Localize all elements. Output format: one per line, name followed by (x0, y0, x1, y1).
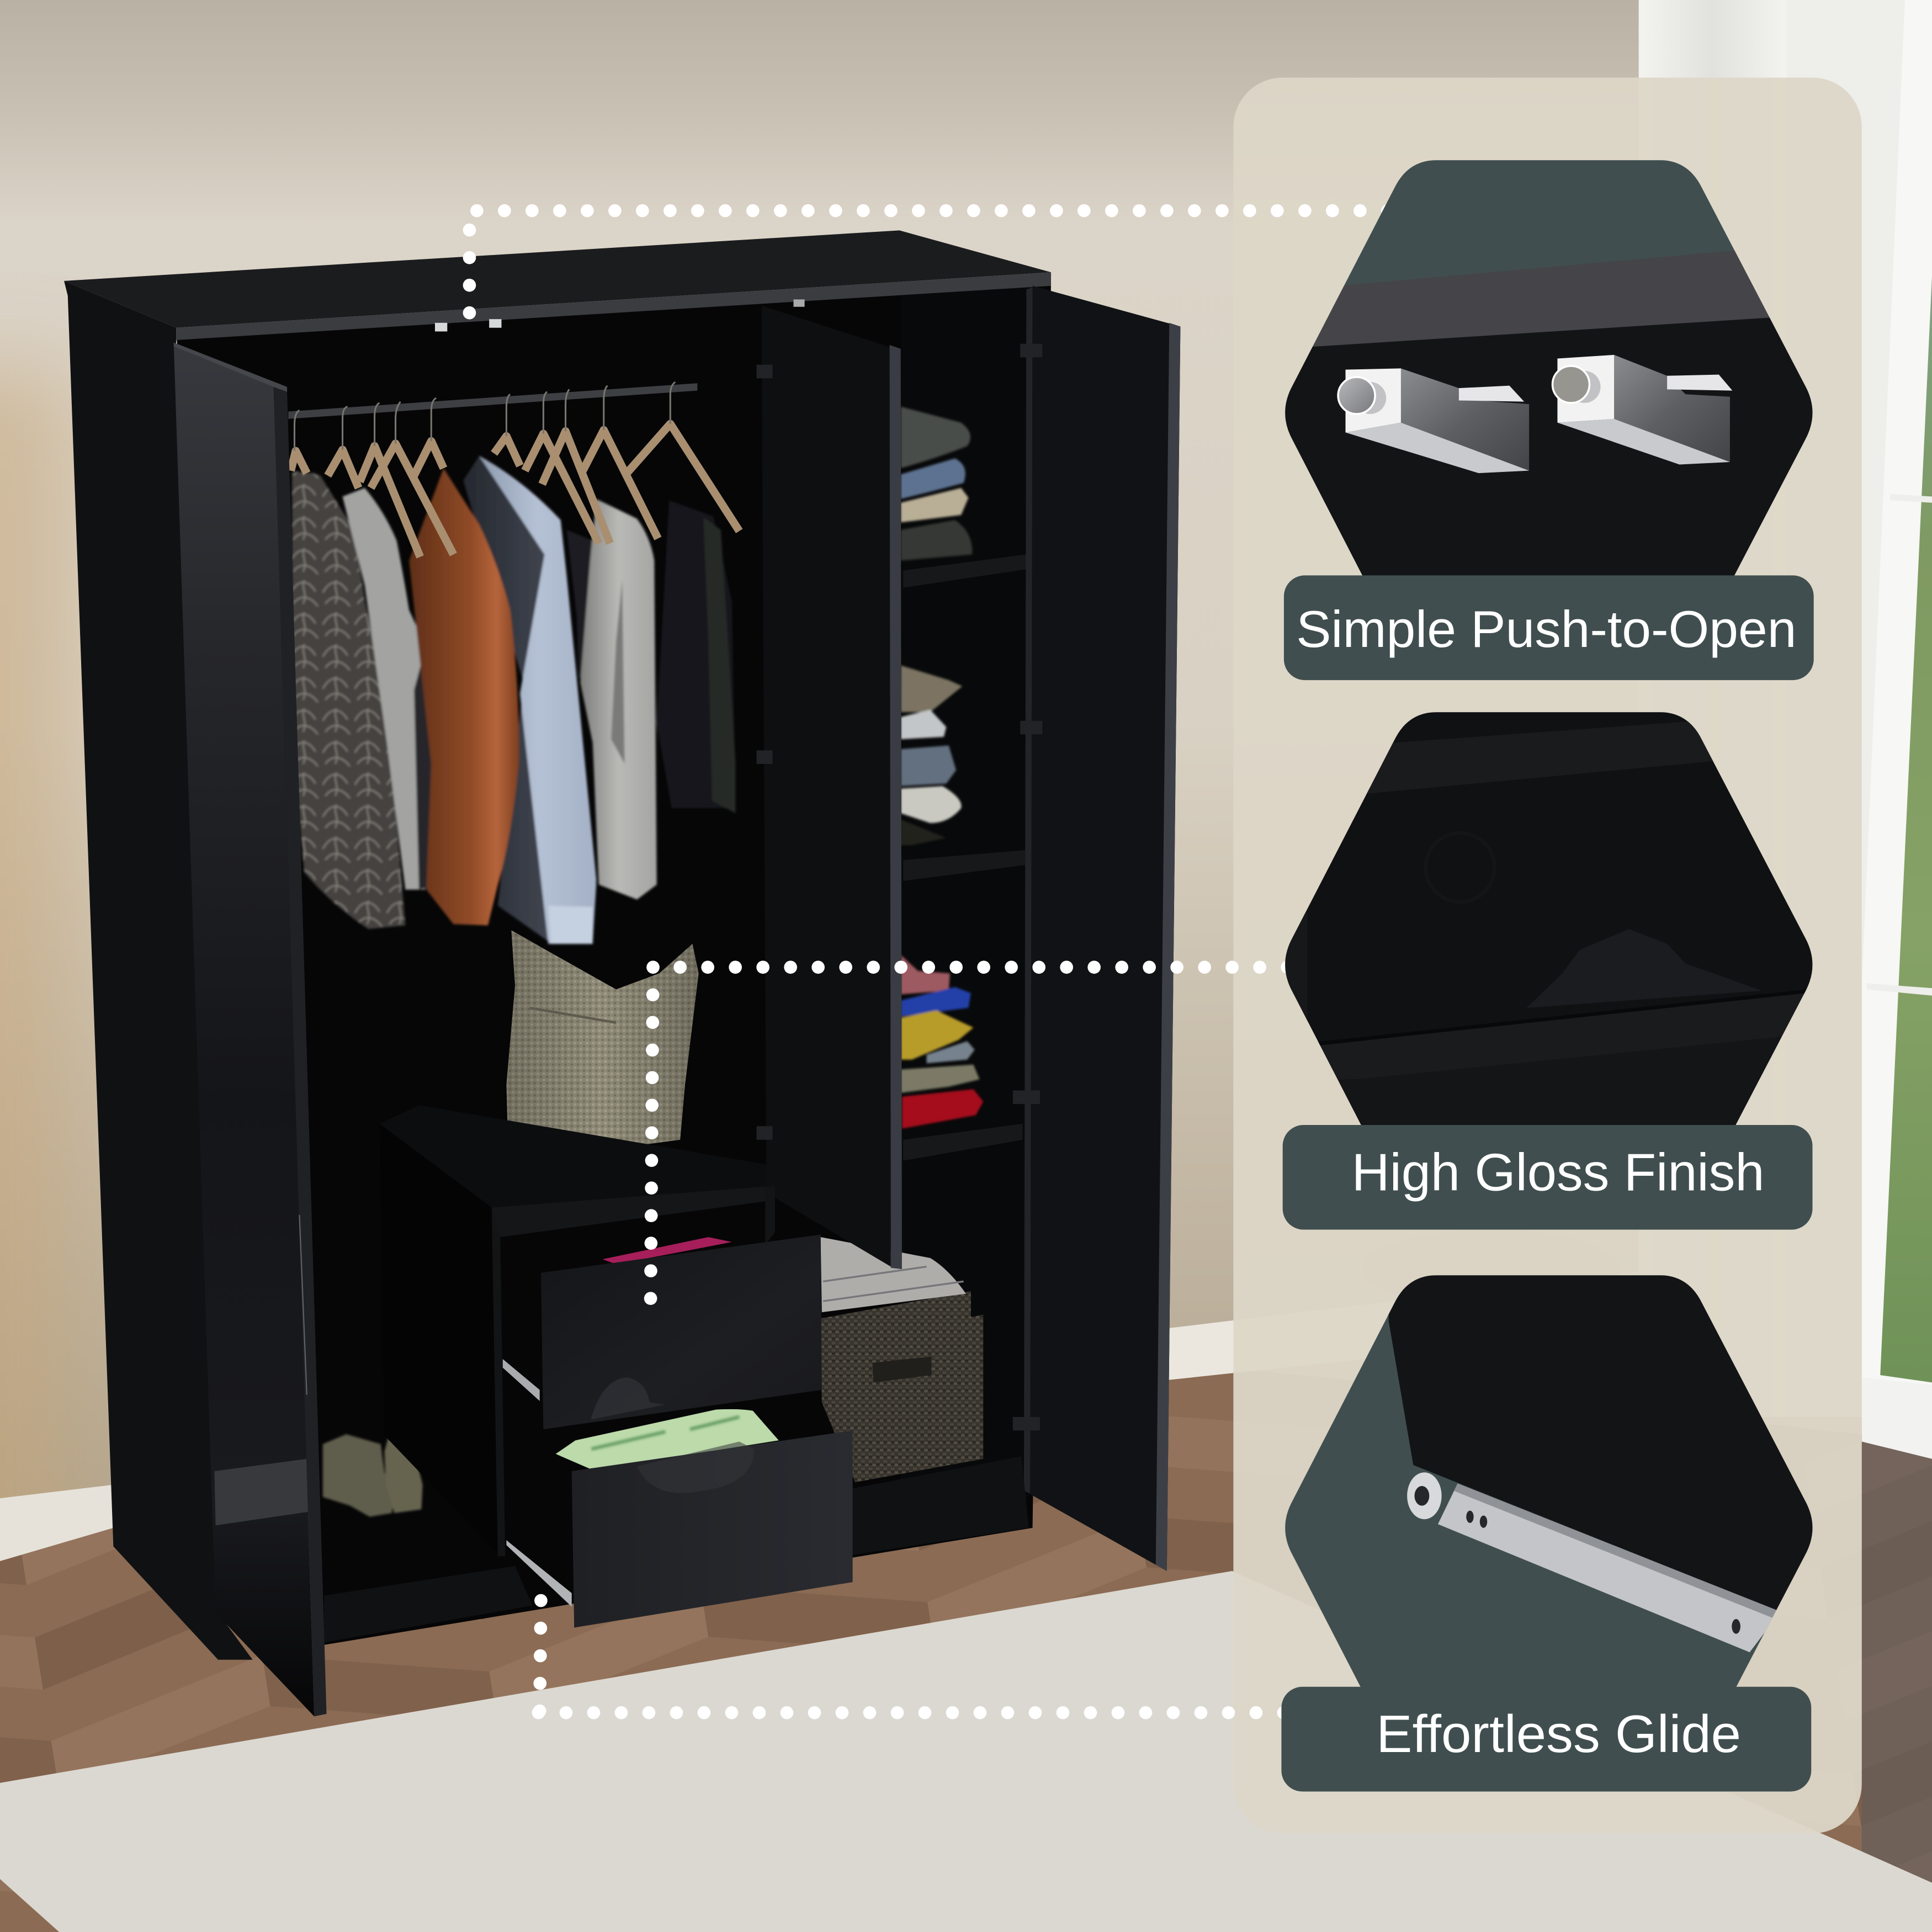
hinges centre (757, 365, 773, 1140)
garment folds (591, 1417, 739, 1449)
light blue shirt (479, 456, 596, 944)
stack 3 (901, 955, 983, 1129)
pink garment (603, 1237, 732, 1264)
dark gap shirts (567, 530, 596, 684)
feature 3: effortless glide (1269, 1263, 1824, 1793)
unit left post (492, 1208, 505, 1556)
latch right (1552, 355, 1732, 465)
unit top front (492, 1187, 765, 1237)
curtain (1639, 0, 1907, 1417)
push latch tips (435, 299, 805, 331)
right boot (384, 1423, 423, 1513)
door edge (274, 384, 327, 1716)
dotted connector: push-to-open (469, 211, 1392, 315)
dark garment (657, 500, 736, 808)
gloss line (299, 1215, 307, 1395)
upper drawer reflection (591, 1378, 665, 1419)
bag zipper (530, 1008, 616, 1023)
upper drawer rail (503, 1359, 540, 1401)
stack 2 (901, 665, 962, 845)
left boot (323, 1434, 394, 1517)
baskets and towels (821, 1237, 983, 1482)
dark blue shirt (463, 456, 596, 941)
centre door (757, 306, 902, 1269)
basket handle (872, 1357, 932, 1382)
top panel front edge (176, 272, 1051, 340)
garden view (1880, 276, 1932, 1382)
interior right bay (901, 286, 1033, 1509)
door inner face (761, 306, 891, 1267)
dotted connector: high gloss (651, 967, 1294, 1301)
hanging rail (288, 383, 697, 419)
unit top face (380, 1105, 766, 1208)
shirt cuff (548, 906, 593, 944)
leather jacket (409, 468, 519, 925)
shoes (323, 1423, 423, 1517)
hexagon image: gloss surface (1285, 712, 1813, 1125)
window mullion upper (1890, 494, 1932, 503)
upper drawer front (541, 1235, 822, 1429)
shelf 3 (903, 1124, 1023, 1161)
label (1284, 575, 1814, 680)
hexagon image: drawer slide (1269, 1263, 1824, 1793)
label (1283, 1125, 1812, 1230)
unit left side (380, 1124, 500, 1556)
green garment (556, 1409, 779, 1470)
bag (506, 930, 699, 1148)
grey dress shirt (580, 499, 657, 899)
hanging clothes (292, 456, 736, 944)
label: Effortless Glide (1376, 1705, 1741, 1764)
rug (0, 1571, 1932, 1932)
window frame (1862, 0, 1932, 1392)
right shelves (901, 407, 1026, 1161)
feature panel (1233, 78, 1862, 1833)
bottom right plinth (853, 1456, 1029, 1555)
curtain pleats (1639, 0, 1787, 1417)
baseboard right (1168, 1244, 1862, 1380)
lower basket (821, 1315, 983, 1482)
bag body (506, 930, 699, 1148)
grey textured shirt (343, 488, 436, 890)
lace jacket (292, 471, 405, 929)
baseboard left (0, 1485, 113, 1561)
window sill (1862, 1378, 1932, 1459)
cream garment (293, 579, 313, 747)
plinth under hanging bay (324, 1566, 532, 1642)
left side panel (64, 281, 253, 1660)
cool floor tint on right (1862, 1442, 1932, 1932)
left door (174, 343, 327, 1716)
label: Simple Push-to-Open (1296, 600, 1796, 658)
label (1281, 1687, 1811, 1792)
shelf 1 (903, 554, 1026, 588)
lower drawer front (572, 1431, 853, 1628)
folded towels (821, 1237, 966, 1312)
unit right post (765, 1187, 775, 1244)
slide rail (1438, 1484, 1780, 1652)
herringbone floor (0, 1368, 1932, 1932)
door face (174, 344, 314, 1716)
bag shading (506, 930, 699, 1148)
right door edge (1156, 323, 1180, 1571)
top panel (64, 230, 1051, 328)
right door (1029, 286, 1180, 1571)
upper basket (821, 1291, 971, 1346)
latch left (1338, 368, 1529, 473)
shelf 2 (903, 850, 1025, 881)
lower drawer reflection (637, 1442, 754, 1493)
door top edge highlight (174, 343, 287, 392)
warm wall light on left (0, 370, 136, 1602)
wardrobe (64, 230, 1180, 1716)
faint plant behind panel (1362, 1230, 1620, 1309)
hexagon image: latches (1285, 160, 1813, 575)
feature 1: push-to-open (1269, 148, 1824, 680)
dotted connector: effortless glide (538, 1601, 1288, 1713)
lower drawer rail (506, 1540, 572, 1607)
stack 1 (901, 407, 972, 561)
right door hinge post (1024, 287, 1033, 1493)
feature 2: high gloss (1269, 702, 1824, 1232)
shirt sleeve shadow (611, 579, 625, 764)
label: High Gloss Finish (1352, 1143, 1764, 1202)
door reflection of baseboard (214, 1459, 308, 1525)
lower drawer inner side (506, 1448, 572, 1593)
drawer unit (380, 1105, 853, 1628)
dark lace strip (704, 518, 736, 813)
dark shirt inner behind jacket (414, 616, 434, 890)
window mullion lower (1867, 983, 1932, 996)
wooden hangers (291, 424, 739, 557)
door edge (890, 345, 902, 1269)
interior back (176, 281, 1051, 1645)
hanger hooks (294, 382, 675, 451)
towel shadow line (823, 1267, 964, 1301)
hinges right (1013, 344, 1042, 1431)
